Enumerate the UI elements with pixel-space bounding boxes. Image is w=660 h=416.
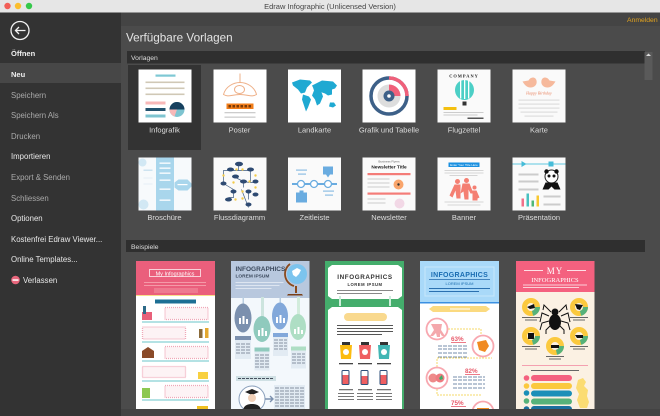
thumbnail: Infografik bbox=[138, 70, 192, 122]
menu items: Speichern bbox=[11, 91, 46, 100]
example 2: Infographics Lorem Ipsum bbox=[231, 261, 310, 412]
selected tile bbox=[128, 65, 201, 150]
example 3: Infographics recycling: INFOGRAPHICS bbox=[337, 274, 393, 281]
tile thumbnails bbox=[138, 70, 566, 210]
example 2: Infographics Lorem Ipsum: LOREM IPSUM bbox=[236, 274, 269, 280]
menu items: Verlassen bbox=[23, 276, 57, 285]
icon: back arrow bbox=[11, 22, 29, 40]
tile labels: Poster bbox=[229, 126, 251, 134]
title bar bbox=[0, 0, 660, 12]
thumbnail: Karte: Happy Birthday bbox=[525, 90, 552, 96]
menu items: Speichern Als bbox=[11, 111, 59, 120]
thumbnail: Banner: Enter Your Title Here bbox=[450, 163, 478, 167]
thumbnail: Karte bbox=[512, 70, 566, 122]
example gallery bbox=[136, 261, 594, 416]
tile labels: Broschüre bbox=[147, 213, 182, 222]
thumbnail: Flugzettel bbox=[438, 70, 490, 122]
section bar: Vorlagen bbox=[127, 51, 645, 64]
menu items: Online Templates... bbox=[11, 255, 78, 264]
title bar: Edraw Infographic (Unlicensed Version) bbox=[264, 2, 396, 11]
example 4: Infographics percentages: INFOGRAPHICS bbox=[431, 272, 488, 279]
menu items: Optionen bbox=[11, 214, 43, 223]
top band bbox=[121, 12, 660, 26]
thumbnail: Grafik und Tabelle bbox=[362, 70, 416, 122]
example 3: Infographics recycling: LOREM IPSUM bbox=[347, 282, 383, 287]
example 1: My Infographics: My Infographics bbox=[156, 271, 195, 277]
menu items: Schliessen bbox=[11, 194, 49, 203]
tile labels: Zeitleiste bbox=[299, 213, 330, 222]
example 4: Infographics percentages: 82% bbox=[465, 368, 478, 375]
menu items: Drucken bbox=[11, 132, 40, 141]
thumbnail: Newsletter: Business Flyers bbox=[378, 160, 400, 164]
example 4: Infographics percentages: 75% bbox=[451, 400, 464, 407]
section bar: Beispiele: Beispiele bbox=[131, 244, 159, 251]
thumbnail: Newsletter: Newsletter Title bbox=[371, 164, 407, 170]
tile labels bbox=[147, 126, 560, 222]
heading: Verfügbare Vorlagen bbox=[126, 32, 233, 44]
menu items: Öffnen bbox=[11, 49, 36, 58]
example 5: My Infographics spider bbox=[516, 261, 594, 412]
tile labels: Flugzettel bbox=[448, 126, 481, 134]
scrollbar bbox=[644, 52, 652, 80]
example 4: Infographics percentages: 63% bbox=[451, 336, 464, 343]
menu items bbox=[11, 49, 102, 285]
bottom band bbox=[121, 409, 660, 416]
menu items: Neu bbox=[11, 70, 26, 79]
thumbnail: Landkarte bbox=[288, 70, 341, 122]
thumbnail: Broschüre bbox=[138, 158, 192, 210]
thumbnail: Flugzettel: COMPANY bbox=[449, 74, 479, 78]
example 3: Infographics recycling bbox=[325, 261, 404, 411]
login link: Anmelden bbox=[627, 17, 658, 24]
example 1: My Infographics bbox=[136, 261, 215, 412]
tile labels: Newsletter bbox=[371, 213, 407, 222]
tile labels: Infografik bbox=[149, 126, 180, 134]
section bar: Vorlagen: Vorlagen bbox=[131, 55, 158, 62]
section bar: Beispiele bbox=[126, 240, 645, 252]
thumbnail: Flussdiagramm bbox=[214, 158, 266, 210]
menu items: Importieren bbox=[11, 152, 50, 161]
thumbnail: Banner bbox=[438, 158, 490, 210]
icon: exit bbox=[11, 276, 20, 284]
thumbnail: Poster bbox=[214, 70, 266, 122]
example 5: My Infographics spider: INFOGRAPHICS bbox=[531, 277, 579, 284]
tile labels: Grafik und Tabelle bbox=[359, 126, 419, 134]
thumbnail: Newsletter bbox=[362, 158, 416, 210]
example 4: Infographics percentages bbox=[420, 261, 499, 416]
menu items: Kostenfrei Edraw Viewer... bbox=[11, 235, 102, 244]
tile labels: Banner bbox=[452, 213, 477, 222]
example 2: Infographics Lorem Ipsum: INFOGRAPHICS bbox=[236, 266, 286, 273]
tile labels: Landkarte bbox=[298, 126, 331, 134]
example 4: Infographics percentages: LOREM IPSUM bbox=[445, 281, 474, 286]
sidebar bbox=[0, 12, 121, 416]
tile labels: Flussdiagramm bbox=[214, 213, 265, 222]
tile labels: Karte bbox=[530, 126, 548, 134]
example 5: My Infographics spider: MY bbox=[547, 266, 563, 276]
menu items: Export & Senden bbox=[11, 173, 70, 182]
thumbnail: Zeitleiste bbox=[288, 158, 341, 210]
thumbnail: Präsentation bbox=[512, 158, 566, 210]
tile labels: Präsentation bbox=[518, 213, 560, 222]
